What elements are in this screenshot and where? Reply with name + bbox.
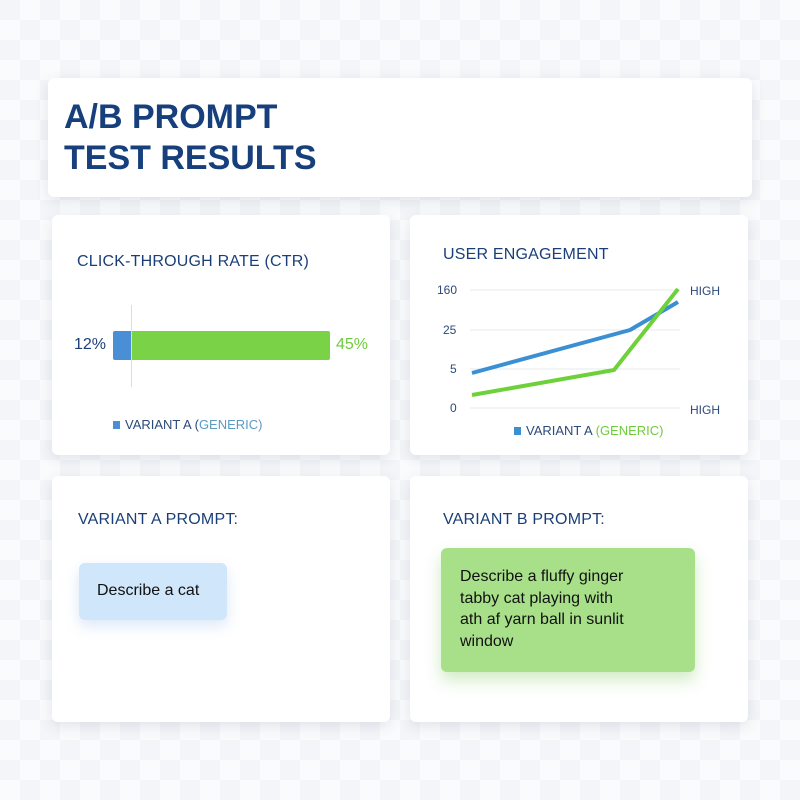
prompt box A: Describe a cat — [97, 582, 199, 599]
engagement heading: USER ENGAGEMENT — [443, 246, 609, 263]
panel: engagement — [410, 215, 748, 455]
line chart: 5 — [450, 362, 457, 376]
legend: VARIANT A (GENERIC) — [125, 417, 262, 432]
bar chart: 45% — [336, 336, 368, 353]
CTR heading: CLICK-THROUGH RATE (CTR) — [77, 253, 309, 270]
line chart: HIGH — [690, 284, 720, 298]
line chart: HIGH — [690, 403, 720, 417]
line chart — [437, 283, 720, 417]
legend: VARIANT A (GENERIC) — [526, 423, 664, 438]
prompt box A — [79, 563, 227, 620]
panel: CTR — [52, 215, 390, 455]
prompt box B: Describe a fluffy ginger — [460, 568, 623, 585]
heading: VARIANT A PROMPT: — [78, 511, 238, 528]
bar chart: 12% — [74, 336, 106, 353]
title: A/B PROMPT — [64, 98, 277, 136]
line chart: 25 — [443, 323, 457, 337]
panel: variant A prompt — [52, 476, 390, 722]
heading: VARIANT B PROMPT: — [443, 511, 605, 528]
prompt box B — [441, 548, 695, 672]
panel: variant B prompt — [410, 476, 748, 722]
prompt box B: ath af yarn ball in sunlit — [460, 611, 624, 628]
line chart: 160 — [437, 283, 457, 297]
prompt box B: tabby cat playing with — [460, 590, 613, 606]
title: TEST RESULTS — [64, 139, 316, 177]
title card — [48, 78, 752, 197]
title — [64, 98, 316, 177]
bar chart — [74, 305, 368, 387]
line chart: 0 — [450, 401, 457, 415]
prompt box B: window — [460, 632, 513, 650]
